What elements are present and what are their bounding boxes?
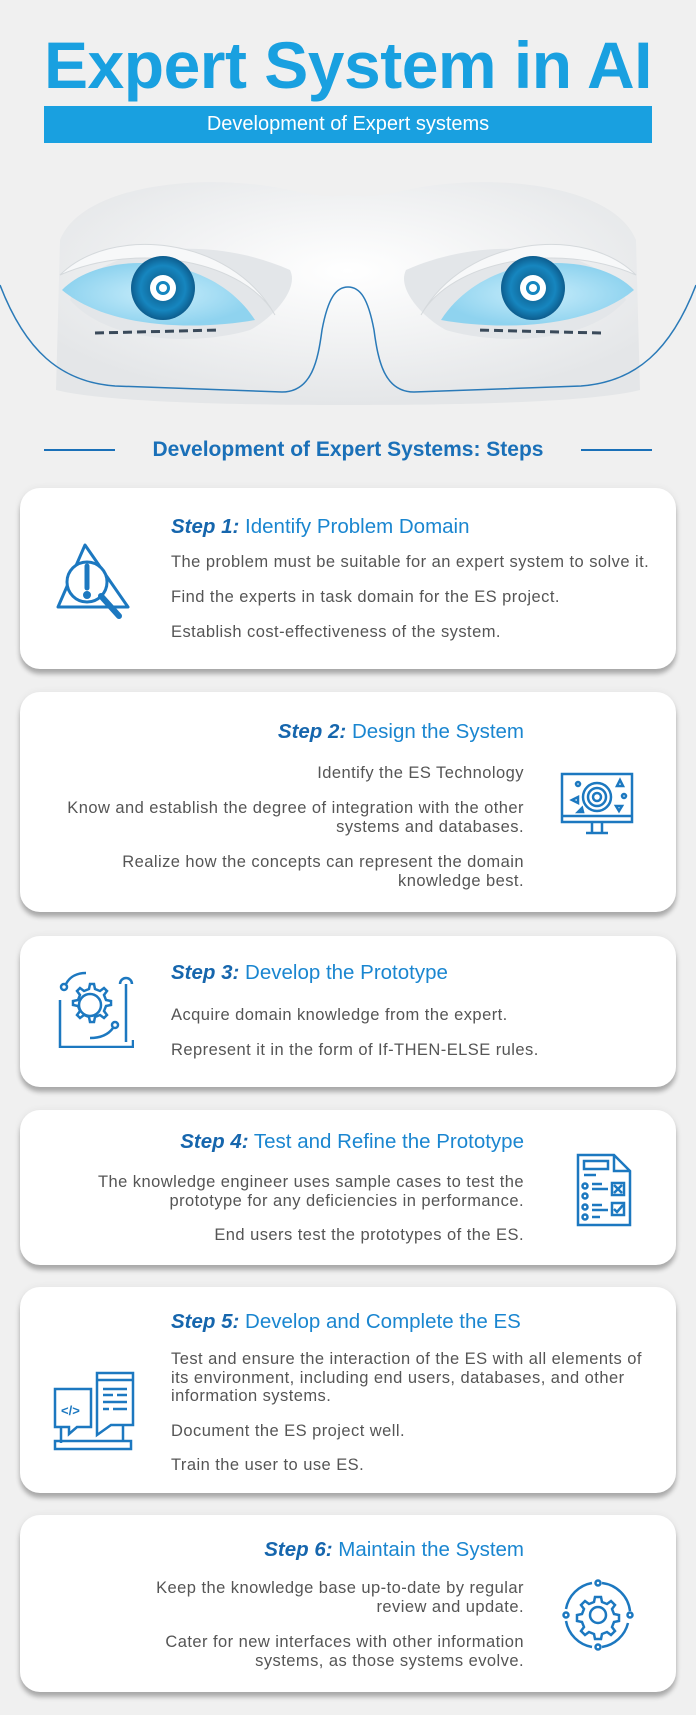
heading: Step 1: Identify Problem Domain xyxy=(171,515,470,538)
panel: step 1: Establish cost-effectiveness of the system. xyxy=(171,623,501,641)
heading: Step 6: Maintain the System xyxy=(264,1538,524,1561)
panel: step 2 xyxy=(20,692,676,912)
panel: step 3: Represent it in the form of If-THEN-ELSE rules. xyxy=(171,1041,539,1059)
heading: Step 4: Test and Refine the Prototype xyxy=(180,1130,524,1153)
text: The problem must be suitable for an expert system to solve it. xyxy=(171,553,649,571)
panel: step 1 xyxy=(20,488,676,669)
panel: step 4: End users test the prototypes of the ES. xyxy=(214,1226,524,1244)
panel: step 5: Document the ES project well. xyxy=(171,1422,405,1440)
title: Expert System in AI xyxy=(44,28,652,102)
icon: warning magnifier xyxy=(56,544,130,619)
panel: step 3 xyxy=(20,936,676,1087)
panel: step 1: Find the experts in task domain for the ES project. xyxy=(171,588,560,606)
text: The knowledge engineer uses sample cases to test the xyxy=(98,1173,524,1191)
text: information systems. xyxy=(171,1387,331,1405)
icon: monitor xyxy=(560,772,634,834)
panel: step 2: Know and establish the degree of integration with the other xyxy=(67,799,524,817)
subtitle band: Development of Expert systems xyxy=(207,113,489,135)
icon: gear cycle xyxy=(562,1579,634,1651)
text: review and update. xyxy=(376,1598,524,1616)
panel: step 6: systems, as those systems evolve. xyxy=(255,1652,524,1670)
text: Identify the ES Technology xyxy=(317,764,524,782)
panel: step 5: Train the user to use ES. xyxy=(171,1456,364,1474)
text: Test and ensure the interaction of the ES with all elements of xyxy=(171,1350,642,1368)
heading: Step 3: Develop the Prototype xyxy=(171,961,448,984)
text: prototype for any deficiencies in performance. xyxy=(169,1192,524,1210)
illustration: robot eyes xyxy=(0,191,696,405)
panel: step 2: knowledge best. xyxy=(398,872,524,890)
subtitle band xyxy=(44,106,652,143)
text xyxy=(171,1350,642,1405)
panel: step 2: systems and databases. xyxy=(336,818,524,836)
icon: code laptop: </> xyxy=(61,1403,80,1418)
panel: step 2: Realize how the concepts can represent the domain xyxy=(122,853,524,871)
heading: Step 5: Develop and Complete the ES xyxy=(171,1310,521,1333)
icon: code laptop xyxy=(54,1372,134,1450)
text: Acquire domain knowledge from the expert. xyxy=(171,1006,508,1024)
text: its environment, including end users, databases, and other xyxy=(171,1368,625,1386)
text xyxy=(156,1579,524,1616)
text: Keep the knowledge base up-to-date by regular xyxy=(156,1579,524,1597)
panel: step 4 xyxy=(20,1110,676,1265)
icon: gear blueprint xyxy=(58,972,134,1048)
panel: step 6: Cater for new interfaces with other information xyxy=(165,1633,524,1651)
left eye xyxy=(60,244,275,333)
right eye xyxy=(421,244,636,333)
panel: step 5 xyxy=(20,1287,676,1493)
heading: Step 2: Design the System xyxy=(278,720,524,743)
section heading: Development of Expert Systems: Steps xyxy=(153,438,543,461)
panel: step 6 xyxy=(20,1515,676,1692)
icon: checklist xyxy=(576,1154,632,1226)
text xyxy=(98,1173,524,1210)
